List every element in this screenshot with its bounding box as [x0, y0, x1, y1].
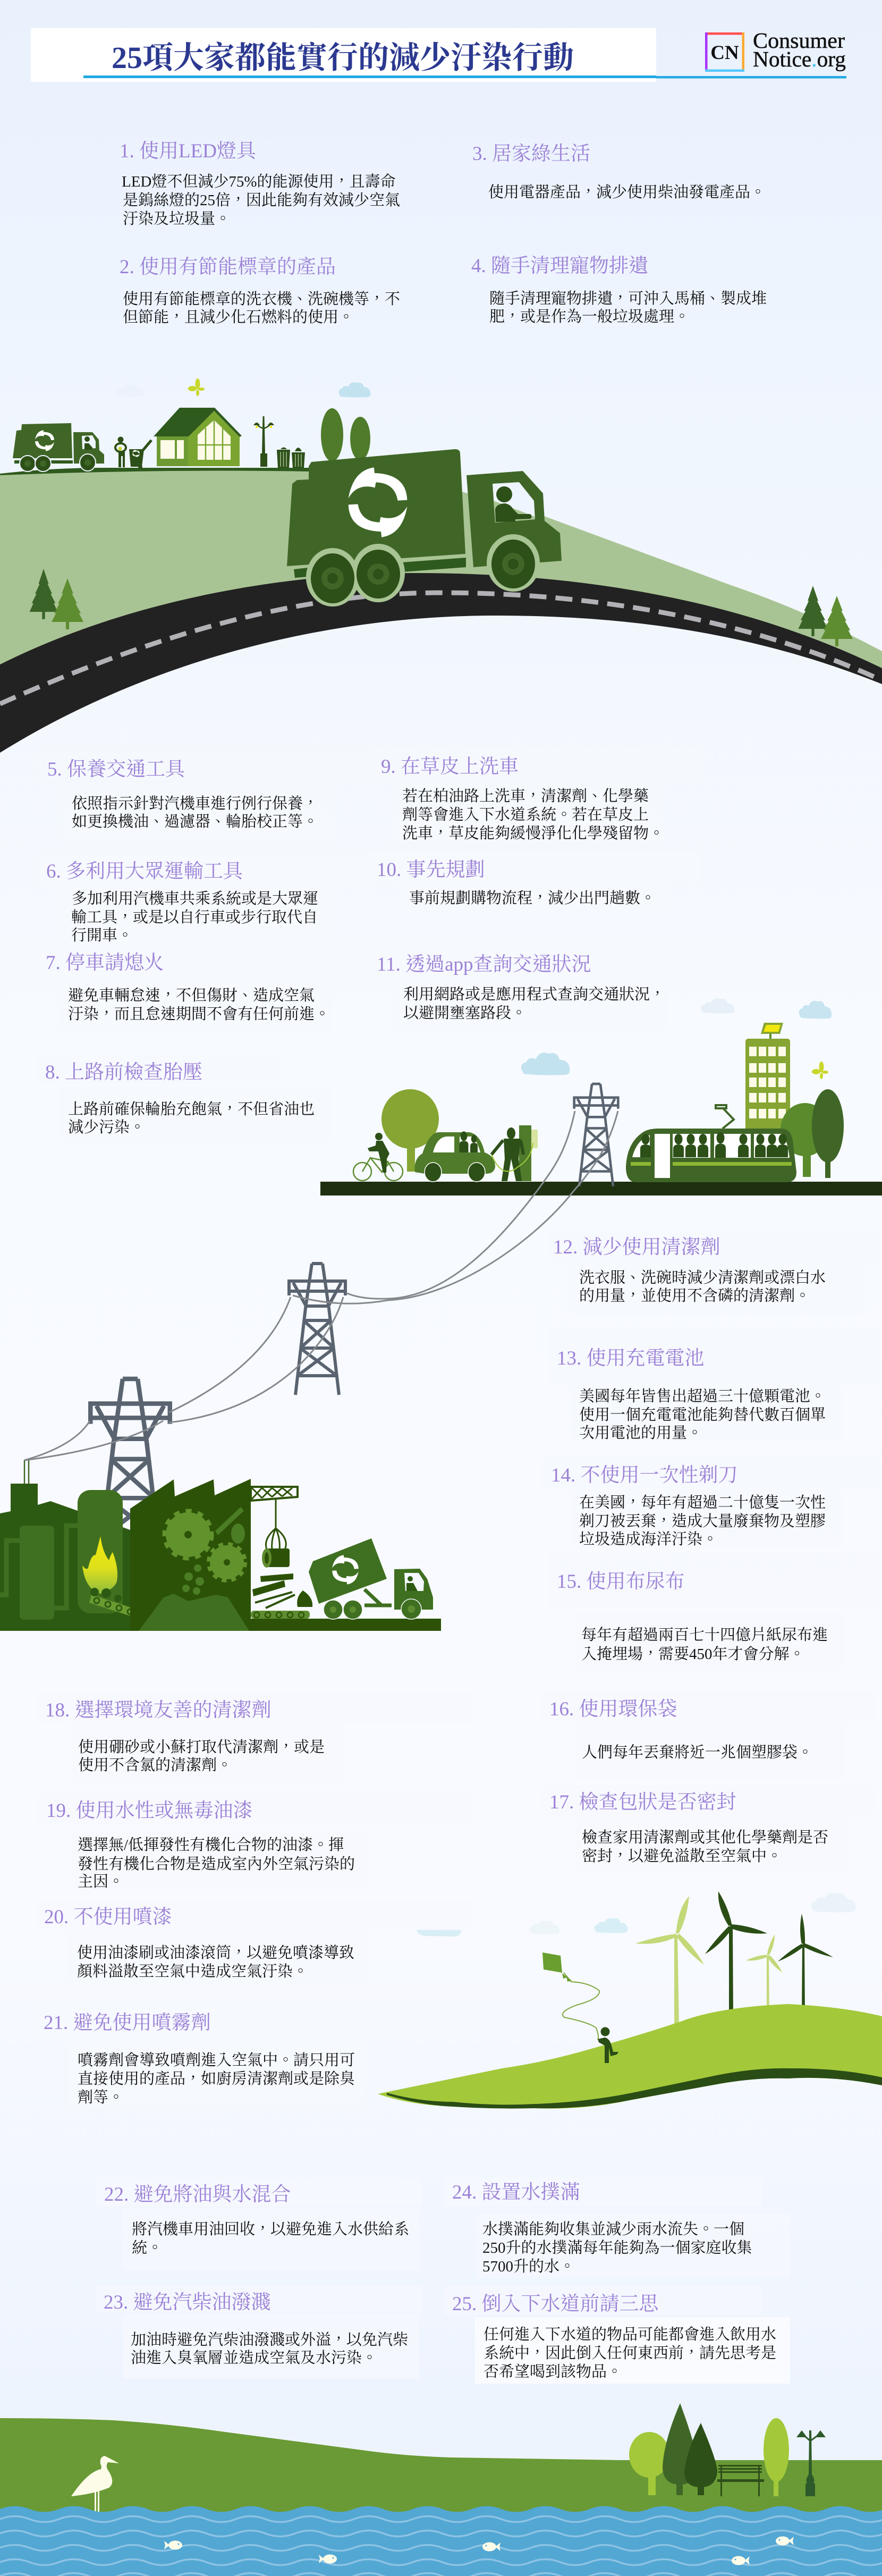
- heading 22: 22. 避免將油與水混合: [104, 2183, 291, 2205]
- text 19: 發性有機化合物是造成室內外空氣污染的: [78, 1855, 355, 1873]
- left tank and pipes: [0, 1526, 78, 1620]
- dark turbine 2: [705, 1891, 767, 2017]
- water: [0, 2506, 882, 2576]
- text 18: 使用不含氯的清潔劑。: [78, 1756, 232, 1774]
- butterfly city: [812, 1062, 828, 1079]
- heading 19: 19. 使用水性或無毒油漆: [46, 1799, 253, 1822]
- item 21: [35, 2005, 473, 2110]
- hill: [0, 470, 882, 704]
- green hill: [378, 2004, 882, 2109]
- text 24: 250升的水撲滿每年能夠為一個家庭收集: [482, 2239, 752, 2257]
- text 13: 次用電池的用量。: [579, 1424, 702, 1442]
- text 9: 劑等會進入下水道系統。若在草皮上: [402, 806, 649, 823]
- text 21: 噴霧劑會導致噴劑進入空氣中。請只用可: [78, 2051, 355, 2069]
- text 16: 人們每年丟棄將近一兆個塑膠袋。: [582, 1744, 813, 1761]
- pale turbine 1: [635, 1896, 704, 2024]
- text 4: 隨手清理寵物排遺，可沖入馬桶、製成堆: [489, 290, 767, 307]
- heron: [71, 2456, 119, 2512]
- logo: ConsumerNotice.org: Notice.org: [753, 47, 846, 71]
- heading 11: 11. 透過app查詢交通狀況: [377, 953, 591, 975]
- chimney pipe: [24, 1460, 29, 1484]
- fish: [164, 2537, 794, 2565]
- heading 17: 17. 檢查包狀是否密封: [549, 1791, 736, 1813]
- heading 10: 10. 事先規劃: [377, 858, 485, 881]
- heading 25: 25. 倒入下水道前請三思: [452, 2293, 659, 2315]
- text 2: 但節能，且減少化石燃料的使用。: [123, 308, 354, 326]
- logo: ConsumerNotice.org: [705, 28, 846, 72]
- text 17: 密封，以避免溢散至空氣中。: [582, 1847, 782, 1865]
- flame: [82, 1536, 117, 1594]
- city pylon: [573, 1084, 619, 1186]
- heading 15: 15. 使用布尿布: [557, 1570, 684, 1593]
- park lamp: [796, 2430, 826, 2496]
- crane with claw and log: [251, 1487, 298, 1568]
- heading 23: 23. 避免汽柴油潑濺: [104, 2291, 271, 2313]
- heading 16: 16. 使用環保袋: [549, 1698, 677, 1720]
- heading 8: 8. 上路前檢查胎壓: [45, 1061, 202, 1083]
- butterfly: [188, 378, 205, 396]
- factory base: [0, 1484, 133, 1631]
- heading 20: 20. 不使用噴漆: [44, 1906, 172, 1928]
- text 19: 主因。: [78, 1873, 124, 1890]
- pine trees right: [798, 586, 853, 646]
- text 1: 是鎢絲燈的25倍，因此能夠有效減少空氣: [123, 191, 400, 209]
- bench: [717, 2465, 764, 2496]
- dark hill band: [387, 2068, 882, 2109]
- clouds: [529, 1893, 855, 1934]
- factory hall: [130, 1479, 251, 1631]
- small truck: [13, 423, 104, 472]
- text 20: 使用油漆刷或油漆滾筒，以避免噴漆導致: [77, 1944, 354, 1962]
- electric car charging: [381, 1089, 538, 1182]
- partial cloud: [417, 1930, 461, 1937]
- item 3: [472, 142, 766, 201]
- conveyor: [89, 1588, 149, 1621]
- text 6: 多加利用汽機車共乘系統或是大眾運: [72, 890, 318, 907]
- small conveyor: [251, 1611, 310, 1619]
- heading 13: 13. 使用充電電池: [557, 1347, 705, 1369]
- item 25: [444, 2286, 790, 2384]
- item 22: [96, 2178, 422, 2270]
- illustration: recycling factory: [0, 1460, 441, 1631]
- text 25: 否希望喝到該物品。: [484, 2363, 622, 2380]
- item 7: [38, 946, 366, 1031]
- text 7: 汙染，而且怠速期間不會有任何前進。: [68, 1005, 330, 1023]
- illustration: wind turbines and kite: [378, 1891, 882, 2109]
- text 4: 肥，或是作為一般垃圾處理。: [489, 308, 690, 325]
- text 5: 依照指示針對汽機車進行例行保養，: [72, 795, 318, 812]
- building with solar panel: [745, 1023, 790, 1132]
- text 23: 加油時避免汽柴油潑濺或外溢，以免汽柴: [131, 2331, 408, 2348]
- big recycling truck: [287, 449, 562, 607]
- heading 21: 21. 避免使用噴霧劑: [44, 2011, 210, 2034]
- text 1: LED燈不但減少75%的能源使用，且壽命: [122, 173, 396, 190]
- illustration: park and river: [0, 2403, 882, 2576]
- furnace tank: [78, 1490, 123, 1613]
- logo: ConsumerNotice.org: CN: [710, 42, 739, 64]
- item 24: [444, 2177, 790, 2278]
- faint cloud: [114, 385, 144, 397]
- cyclist: [353, 1133, 403, 1181]
- item 2: [120, 256, 400, 326]
- text 11: 利用網路或是應用程式查詢交通狀況，: [403, 986, 665, 1003]
- item 8: [37, 1056, 332, 1142]
- heading 9: 9. 在草皮上洗車: [381, 755, 519, 778]
- pylon left: [89, 1379, 172, 1564]
- ground strip: [251, 1619, 441, 1631]
- text 23: 油進入臭氧層並造成空氣及水污染。: [131, 2349, 377, 2367]
- kite runner: [598, 2027, 618, 2063]
- text 13: 使用一個充電電池能夠替代數百個單: [579, 1406, 826, 1424]
- item 18: [37, 1693, 473, 1782]
- text 1: 汙染及垃圾量。: [123, 210, 231, 228]
- text 19: 選擇無/低揮發性有機化合物的油漆。揮: [78, 1836, 344, 1854]
- text 24: 5700升的水。: [482, 2258, 575, 2275]
- text 25: 任何進入下水道的物品可能都會進入飲用水: [484, 2326, 776, 2343]
- house: [154, 408, 242, 466]
- item 9: [371, 748, 703, 842]
- text 8: 上路前確保輪胎充飽氣，不但省油也: [68, 1100, 315, 1118]
- text 7: 避免車輛怠速，不但傷財、造成空氣: [68, 987, 315, 1004]
- mound: [139, 1594, 249, 1631]
- scoop: [297, 1590, 312, 1607]
- heading 5: 5. 保養交通工具: [47, 758, 186, 780]
- pale turbine 3: [746, 1934, 782, 2019]
- text 25: 系統中，因此倒入任何東西前，請先思考是: [484, 2344, 776, 2362]
- text 14: 在美國，每年有超過二十億隻一次性: [579, 1494, 826, 1511]
- text 14: 垃圾造成海洋汙染。: [579, 1530, 718, 1548]
- text 11: 以避開壅塞路段。: [403, 1004, 527, 1022]
- text 15: 入掩埋場，需要450年才會分解。: [581, 1645, 805, 1663]
- item 23: [96, 2286, 422, 2379]
- text 2: 使用有節能標章的洗衣機、洗碗機等，不: [123, 290, 400, 308]
- pine trees left: [30, 569, 83, 629]
- text 24: 水撲滿能夠收集並減少雨水流失。一個: [482, 2220, 744, 2238]
- heading 6: 6. 多利用大眾運輸工具: [46, 860, 244, 882]
- item 13: [548, 1329, 878, 1442]
- heading 4: 4. 隨手清理寵物排遺: [471, 255, 649, 277]
- text 5: 如更換機油、過濾器、輪胎校正等。: [72, 813, 318, 830]
- text 13: 美國每年皆售出超過三十億顆電池。: [579, 1387, 826, 1405]
- blue cloud: [338, 382, 370, 397]
- text 21: 直接使用的產品，如廚房清潔劑或是除臭: [78, 2070, 355, 2087]
- tram: [626, 1105, 796, 1182]
- text 6: 輸工具，或是以自行車或步行取代自: [71, 908, 318, 926]
- heading 18: 18. 選擇環境友善的清潔劑: [45, 1699, 271, 1721]
- text 17: 檢查家用清潔劑或其他化學藥劑是否: [582, 1829, 828, 1846]
- item 11: [368, 948, 700, 1030]
- text 10: 事前規劃購物流程，減少出門趟數。: [409, 889, 656, 907]
- heading 14: 14. 不使用一次性剃刀: [551, 1464, 737, 1486]
- item 4: [471, 255, 767, 325]
- city clouds: [521, 998, 832, 1075]
- street lamp: [253, 416, 274, 467]
- text 14: 剃刀被丟棄，造成大量廢棄物及塑膠: [579, 1512, 826, 1530]
- trash cans: [277, 448, 305, 468]
- item 10: [368, 852, 700, 910]
- tall trees behind truck: [321, 408, 370, 461]
- park trees: [629, 2403, 789, 2496]
- gears: [165, 1507, 245, 1595]
- text 15: 每年有超過兩百七十四億片紙尿布進: [581, 1626, 828, 1644]
- text 22: 將汽機車用油回收，以避免進入水供給系: [132, 2220, 409, 2238]
- item 16: [541, 1691, 875, 1779]
- item 15: [548, 1552, 878, 1670]
- item 14: [541, 1458, 878, 1548]
- item 1: [120, 140, 400, 228]
- ground: [320, 1182, 882, 1196]
- text 9: 洗車，草皮能夠緩慢淨化化學殘留物。: [402, 824, 664, 842]
- text 12: 的用量，並使用不含磷的清潔劑。: [579, 1287, 810, 1304]
- item 17: [541, 1785, 875, 1873]
- text 8: 減少污染。: [68, 1118, 145, 1136]
- heading 12: 12. 減少使用清潔劑: [553, 1236, 720, 1258]
- item 12: [548, 1230, 878, 1315]
- header: [31, 28, 846, 82]
- grass: [0, 2418, 882, 2514]
- text 6: 行開車。: [71, 927, 133, 944]
- title underline: [83, 75, 846, 79]
- illustration: power lines: [24, 1111, 618, 1460]
- item 19: [37, 1794, 473, 1890]
- text 18: 使用硼砂或小蘇打取代清潔劑，或是: [78, 1738, 325, 1756]
- hilltop band: [0, 468, 309, 475]
- road: [0, 573, 882, 753]
- item 20: [37, 1900, 473, 1989]
- text 22: 統。: [132, 2239, 163, 2257]
- dark turbine 4: [778, 1914, 833, 2015]
- logs pile: [252, 1573, 295, 1608]
- person with recycling bin: [115, 437, 151, 469]
- logo: ConsumerNotice.org: Consumer: [753, 28, 845, 53]
- title: 25項大家都能實行的減少汙染行動: [112, 40, 574, 75]
- text 9: 若在柏油路上洗車，清潔劑、化學藥: [402, 787, 649, 805]
- heading 3: 3. 居家綠生活: [472, 142, 590, 165]
- kite: [542, 1952, 599, 2040]
- heading 24: 24. 設置水撲滿: [452, 2181, 580, 2203]
- illustration: city scene: [320, 998, 882, 1196]
- dump truck: [309, 1538, 433, 1619]
- item 6: [38, 855, 370, 944]
- pylon center: [288, 1264, 346, 1395]
- right trees: [781, 1089, 844, 1178]
- item 5: [38, 751, 370, 841]
- heading 2: 2. 使用有節能標章的產品: [120, 256, 336, 278]
- text 3: 使用電器產品，減少使用柴油發電產品。: [488, 183, 766, 201]
- heading 7: 7. 停車請熄火: [46, 952, 164, 974]
- text 21: 劑等。: [78, 2089, 124, 2106]
- heading 1: 1. 使用LED燈具: [120, 140, 257, 162]
- illustration: recycling truck on hill road: [0, 378, 882, 753]
- text 12: 洗衣服、洗碗時減少清潔劑或漂白水: [579, 1269, 826, 1286]
- text 20: 顏料溢散至空氣中造成空氣汙染。: [77, 1963, 308, 1980]
